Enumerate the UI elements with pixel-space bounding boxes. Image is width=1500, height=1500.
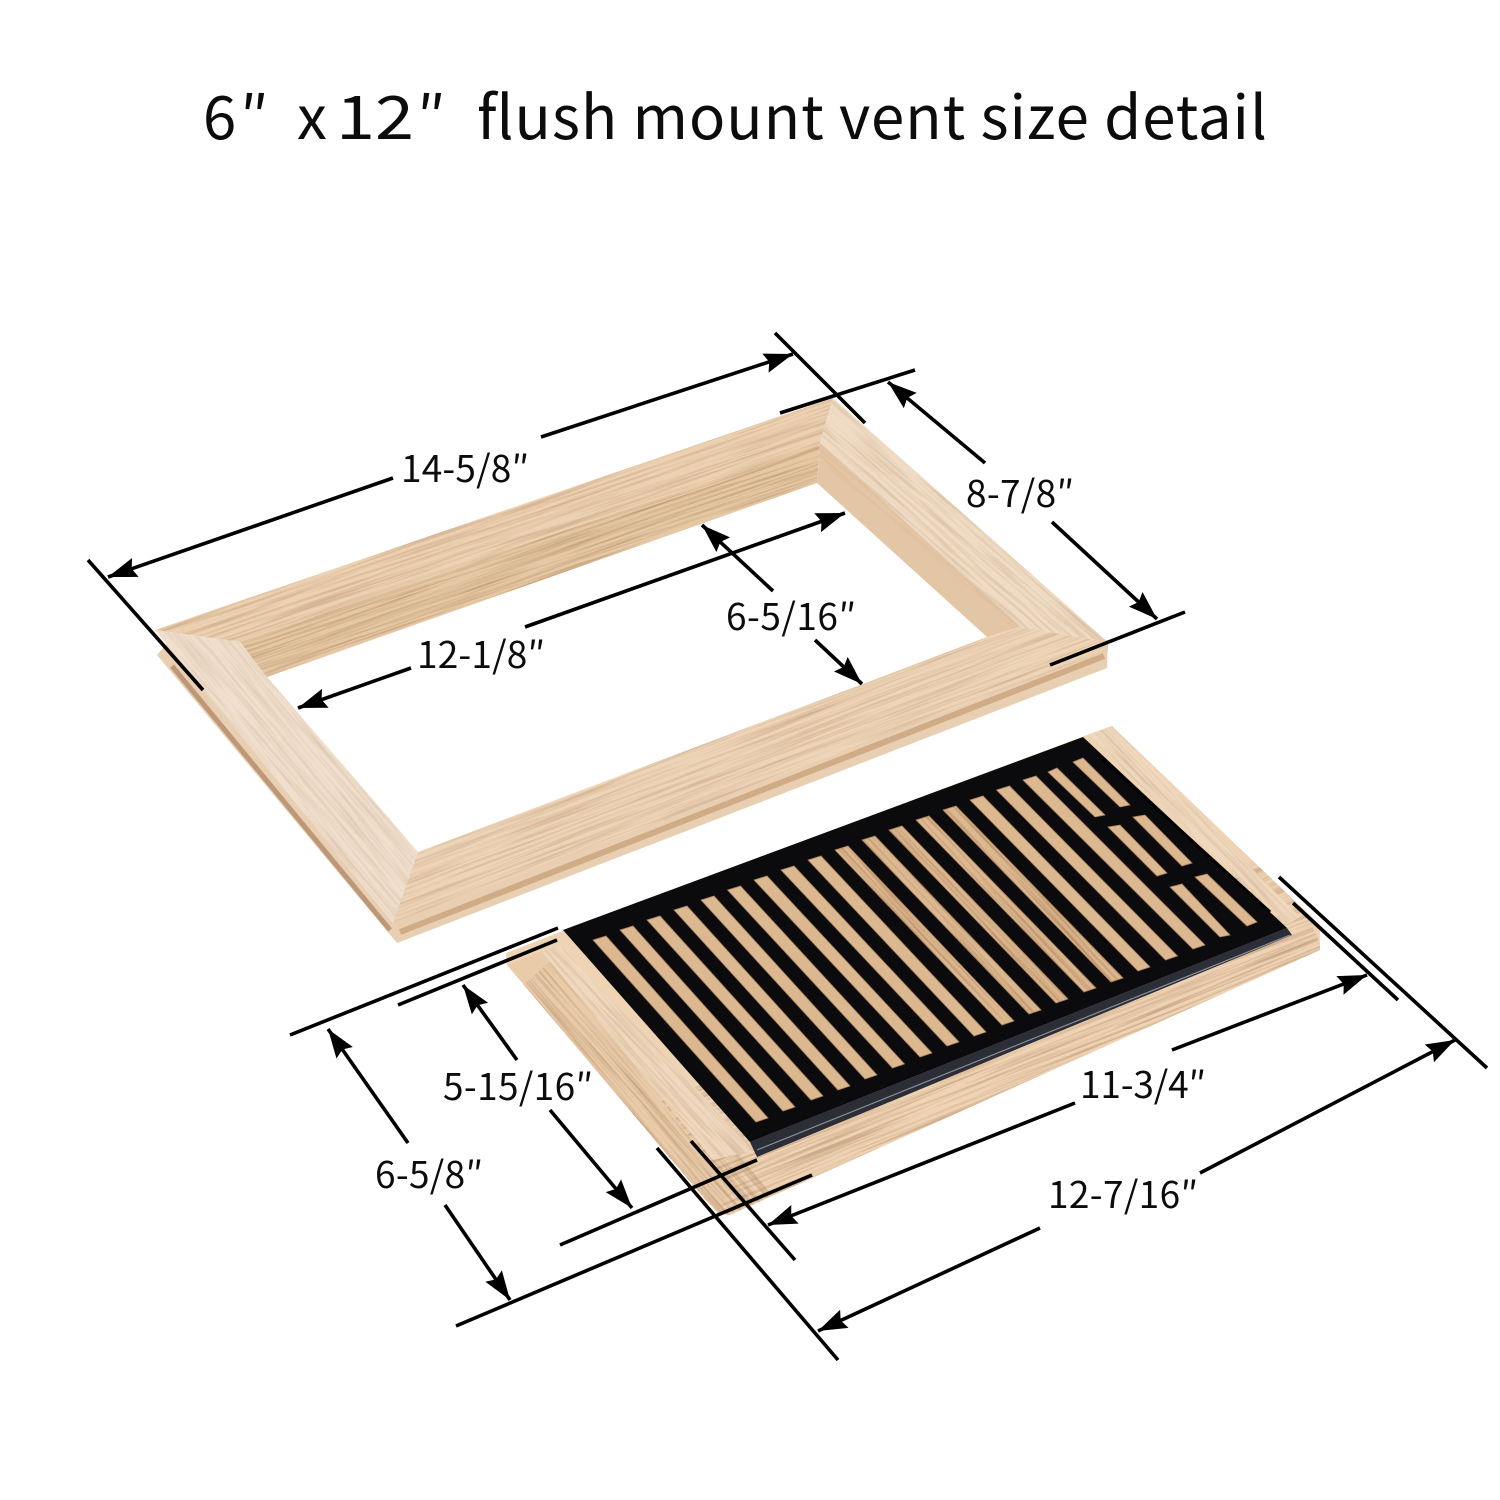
frame top rail (155, 398, 833, 642)
dimension: 8-7/8 overall frame width (780, 370, 1185, 665)
dimension: 12-1/8 opening length (298, 513, 845, 708)
title: 6 (203, 70, 236, 157)
title: 12 (336, 70, 414, 157)
dimension: 12-7/16 base length: 12-7/16″ (1048, 1165, 1198, 1219)
title: ″ (417, 70, 445, 157)
grille plate (563, 737, 1287, 1142)
dimension: 5-15/16 grille width (398, 940, 757, 1245)
frame bottom rail (393, 627, 1108, 922)
dimension: 6-5/16 opening width (702, 525, 862, 684)
dimension: 6-5/8 base width (290, 928, 812, 1326)
dimension: 6-5/8 base width: 6-5/8″ (375, 1145, 483, 1199)
frame under layer (157, 640, 1108, 943)
title: ″ (240, 70, 268, 157)
grille side lip (750, 928, 1292, 1157)
frame inner wall (240, 443, 820, 677)
dimension: 14-5/8 overall frame length: 14-5/8″ (401, 439, 529, 493)
black metal grille (563, 737, 1292, 1157)
title: x (297, 70, 327, 157)
dimension: 8-7/8 overall frame width: 8-7/8″ (966, 464, 1074, 518)
base raised right rail (1087, 726, 1300, 925)
title: flush mount vent size detail (477, 70, 1267, 157)
base raised left rail (542, 946, 754, 1160)
frame right rail (817, 398, 1106, 641)
wood base: lower piece (506, 726, 1320, 1215)
grille shadow edge (1100, 757, 1270, 912)
frame left rail (155, 630, 418, 923)
dimension: 5-15/16 grille width: 5-15/16″ (443, 1057, 593, 1111)
dimension: 12-1/8 opening length: 12-1/8″ (417, 625, 545, 679)
base board (506, 726, 1320, 1215)
dimension: 14-5/8 overall frame length (88, 333, 865, 690)
dimension: 11-3/4 grille length (691, 903, 1398, 1260)
wood frame: top piece (76, 257, 1159, 1023)
dimension: 11-3/4 grille length: 11-3/4″ (1080, 1055, 1206, 1109)
dimension: 12-7/16 base length (657, 877, 1487, 1360)
grille slots (592, 758, 1258, 1122)
dimension: 6-5/16 opening width: 6-5/16″ (726, 587, 856, 641)
